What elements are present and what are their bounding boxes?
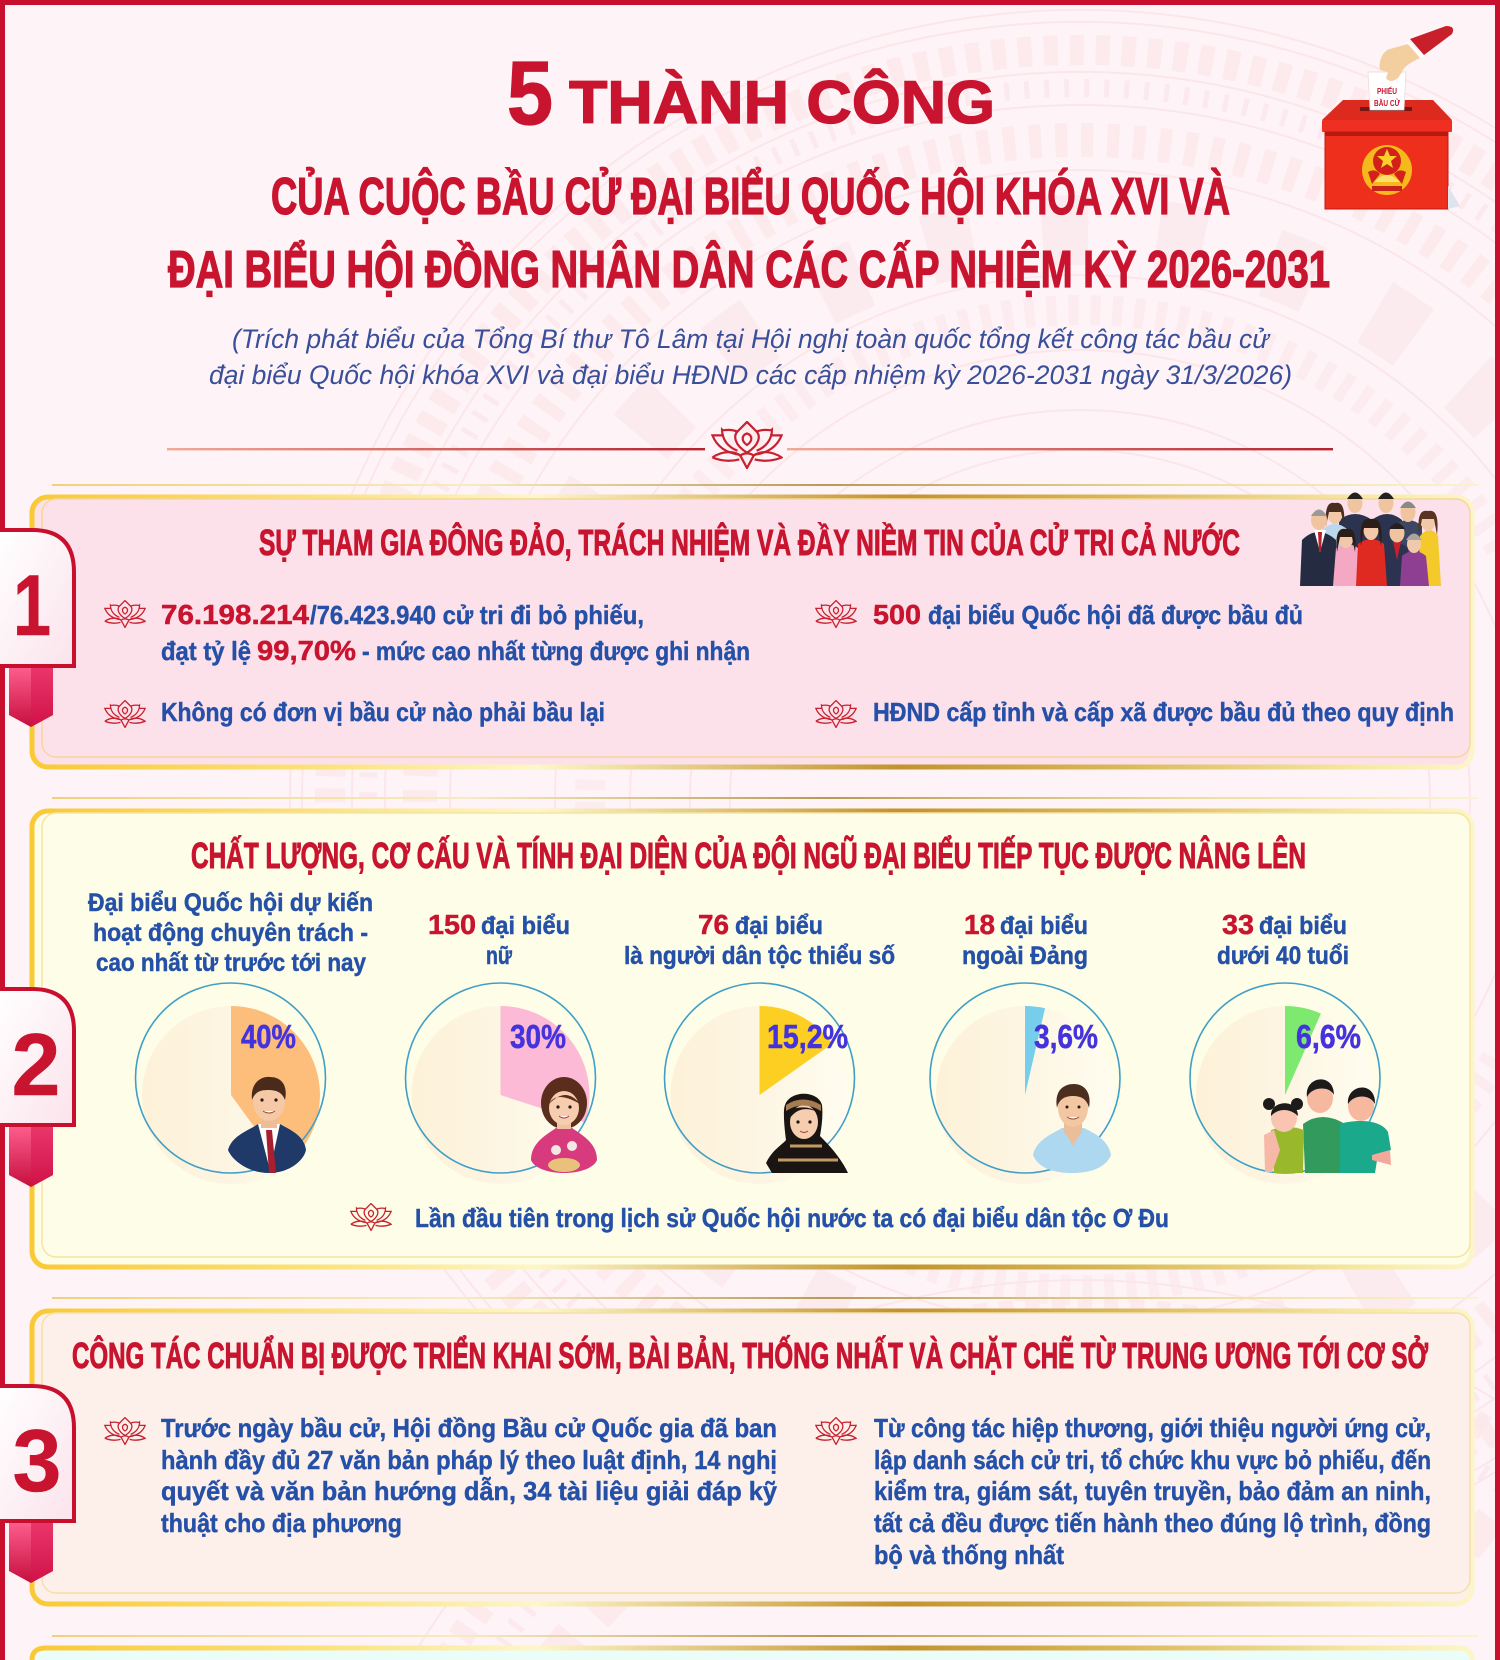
chart column: deputies under 40: 33 [1222,909,1254,940]
text block: legal documents: hành đầy đủ 27 văn bản pháp lý theo luật định, 14 nghị [161,1445,777,1475]
bullet: voter turnout: - mức cao nhất từng được ghi nhận [362,636,750,666]
chart column: non-Party deputies [930,909,1120,1184]
text block: consultation process: kiểm tra, giám sát, tuyên truyền, bảo đảm an ninh, [874,1476,1431,1506]
avatar: female deputy [531,1077,597,1173]
divider with lotus [167,422,1333,468]
ballot paper: BẦU CỬ [1374,98,1400,108]
text block: legal documents: quyết và văn bản hướng dẫn, 34 tài liệu giải đáp kỹ [161,1476,778,1506]
bullet: voter turnout: /76.423.940 cử tri đi bỏ phiếu, [310,600,644,630]
panel 4 (cropped top edge) [32,1636,1478,1660]
chart column: full-time deputies: Đại biểu Quốc hội dự kiến [88,889,373,917]
text block: legal documents: Trước ngày bầu cử, Hội đồng Bầu cử Quốc gia đã ban [161,1413,777,1443]
bullet: voter turnout [105,599,750,666]
badge 1: 1 [13,558,51,654]
text block: legal documents [105,1413,778,1538]
illustration: voters group [1300,492,1441,586]
ballot paper: PHIẾU [1377,86,1397,96]
chart column: ethnic minority deputies: 76 [698,909,729,940]
chart column: women deputies: 150 [428,909,476,940]
chart column: women deputies: nữ [486,942,513,970]
chart column: full-time deputies: hoạt động chuyên trách - [93,919,368,947]
chart column: deputies under 40: đại biểu [1259,912,1347,940]
text block: consultation process: lập danh sách cử tri, tổ chức khu vực bỏ phiếu, đến [874,1445,1431,1475]
text block: consultation process [816,1413,1431,1570]
chart column: women deputies: đại biểu [481,912,570,940]
national emblem [1362,145,1412,195]
chart column: women deputies: 30% [510,1018,566,1055]
panel 2 [32,798,1478,1267]
hand [1380,41,1424,81]
panel 1 [32,485,1478,767]
title: 5 [507,44,553,144]
text block: consultation process: bộ và thống nhất [874,1540,1064,1570]
avatar: male deputy [228,1077,306,1173]
ballot paper [1368,72,1406,110]
bullet: 500 deputies: đại biểu Quốc hội đã được bầu đủ [928,600,1303,630]
bullet: voter turnout: 99,70% [257,635,356,666]
avatar: man in blue shirt [1033,1084,1111,1173]
chart column: full-time deputies: 40% [241,1018,296,1055]
badge 3: 3 [13,1411,61,1510]
chart column: non-Party deputies: ngoài Đảng [962,942,1088,970]
chart column: deputies under 40: dưới 40 tuổi [1217,942,1349,970]
chart column: deputies under 40 [1190,909,1391,1184]
title: THÀNH CÔNG [569,69,995,136]
chart column: non-Party deputies: 18 [964,909,995,940]
avatar: three young people [1263,1079,1391,1173]
badge 1 [0,530,74,727]
chart column: non-Party deputies: 3,6% [1034,1018,1098,1055]
bullet: 500 deputies: 500 [873,599,921,630]
chart column: women deputies [406,909,597,1184]
text block: consultation process: tất cả đều được tiến hành theo đúng lộ trình, đồng [874,1508,1431,1538]
chart column: non-Party deputies: đại biểu [1000,912,1088,940]
bullet: voter turnout: 76.198.214 [161,599,309,630]
bullet: 500 deputies [816,599,1303,630]
chart column: ethnic minority deputies: là người dân tộc thiểu số [624,942,895,970]
chart column: ethnic minority deputies: đại biểu [735,912,823,940]
chart column: ethnic minority deputies [624,909,895,1184]
badge 2: 2 [12,1015,60,1114]
bullet: no re-election: Không có đơn vị bầu cử nào phải bầu lại [161,697,605,727]
chart column: ethnic minority deputies: 15,2% [767,1018,848,1055]
subtitle [209,324,1292,390]
subtitle: đại biểu Quốc hội khóa XVI và đại biểu HĐND các cấp nhiệm kỳ 2026-2031 ngày 31/3/2026) [209,360,1292,390]
chart column: full-time deputies: cao nhất từ trước tới nay [96,949,366,977]
chart column: full-time deputies [88,889,373,1184]
chart column: deputies under 40: 6,6% [1296,1018,1361,1055]
badge 2 [0,989,74,1187]
subtitle: (Trích phát biểu của Tổng Bí thư Tô Lâm tại Hội nghị toàn quốc tổng kết công tác bầu cử [232,324,1271,354]
bullet: voter turnout: đạt tỷ lệ [161,636,251,666]
text block: consultation process: Từ công tác hiệp thương, giới thiệu người ứng cử, [874,1413,1431,1443]
badge 3 [0,1386,74,1583]
bullet: first O Du deputy: Lần đầu tiên trong lịch sử Quốc hội nước ta có đại biểu dân tộc Ơ Đu [415,1203,1169,1233]
title [168,44,1330,299]
avatar: ethnic minority woman [766,1094,848,1173]
text block: legal documents: thuật cho địa phương [161,1508,402,1538]
panel 3 [32,1298,1478,1604]
icon: ballot box [1322,26,1460,209]
